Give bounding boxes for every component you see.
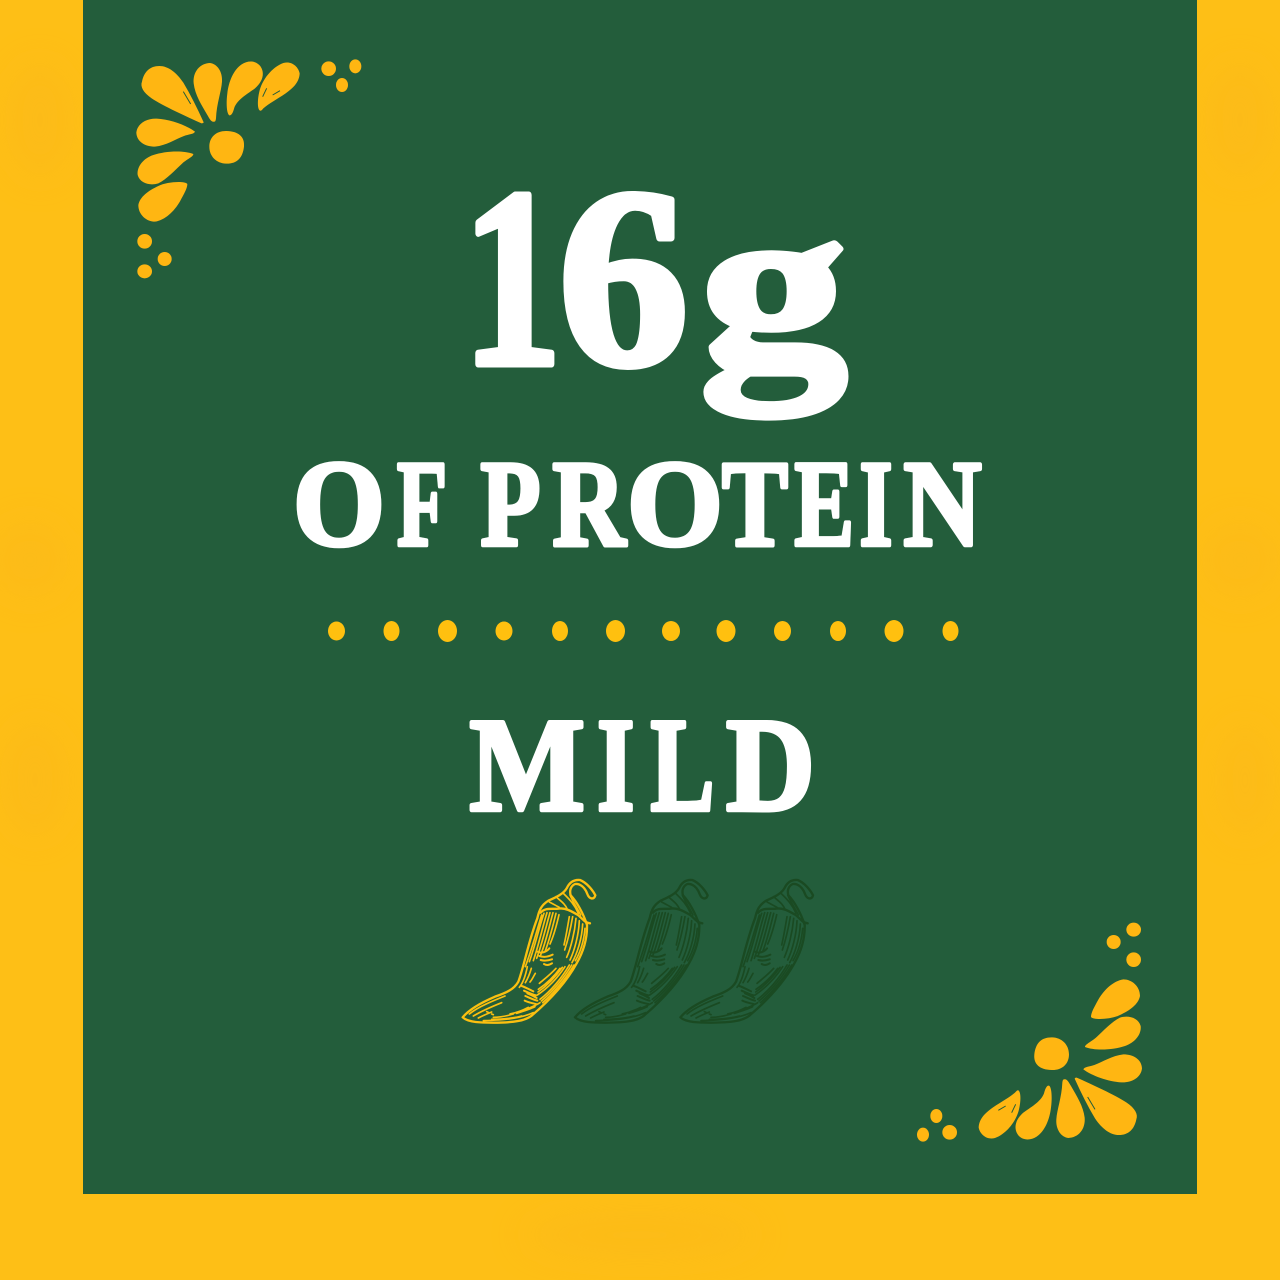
heading: mild: M bbox=[470, 691, 585, 839]
heading: of protein: E bbox=[794, 435, 854, 572]
icon: dark chili pepper 2 bbox=[575, 880, 708, 1023]
heading: of protein: F bbox=[397, 435, 444, 572]
heading: of protein: O bbox=[293, 435, 385, 572]
heading: of protein: R bbox=[552, 435, 626, 572]
icon: yellow chili pepper bbox=[463, 880, 595, 1023]
heading: mild: D bbox=[726, 691, 815, 839]
decoration: bottom-right flower corner bbox=[917, 923, 1142, 1142]
heading: mild: L bbox=[650, 691, 714, 839]
dotted divider bbox=[328, 620, 958, 642]
heading: 16g: 1 bbox=[462, 137, 562, 420]
heading: of protein: I bbox=[860, 435, 892, 572]
heading: of protein: N bbox=[904, 435, 982, 572]
heading: of protein: P bbox=[480, 435, 540, 572]
decoration: top-left flower corner bbox=[136, 59, 361, 278]
heading: 16g: 6 bbox=[558, 137, 689, 420]
heading: of protein: O bbox=[627, 435, 723, 572]
heading: of protein: T bbox=[722, 435, 788, 572]
heading: mild: I bbox=[597, 691, 634, 839]
heading: 16g: g bbox=[700, 156, 847, 417]
icon: dark chili pepper 3 bbox=[680, 880, 813, 1023]
